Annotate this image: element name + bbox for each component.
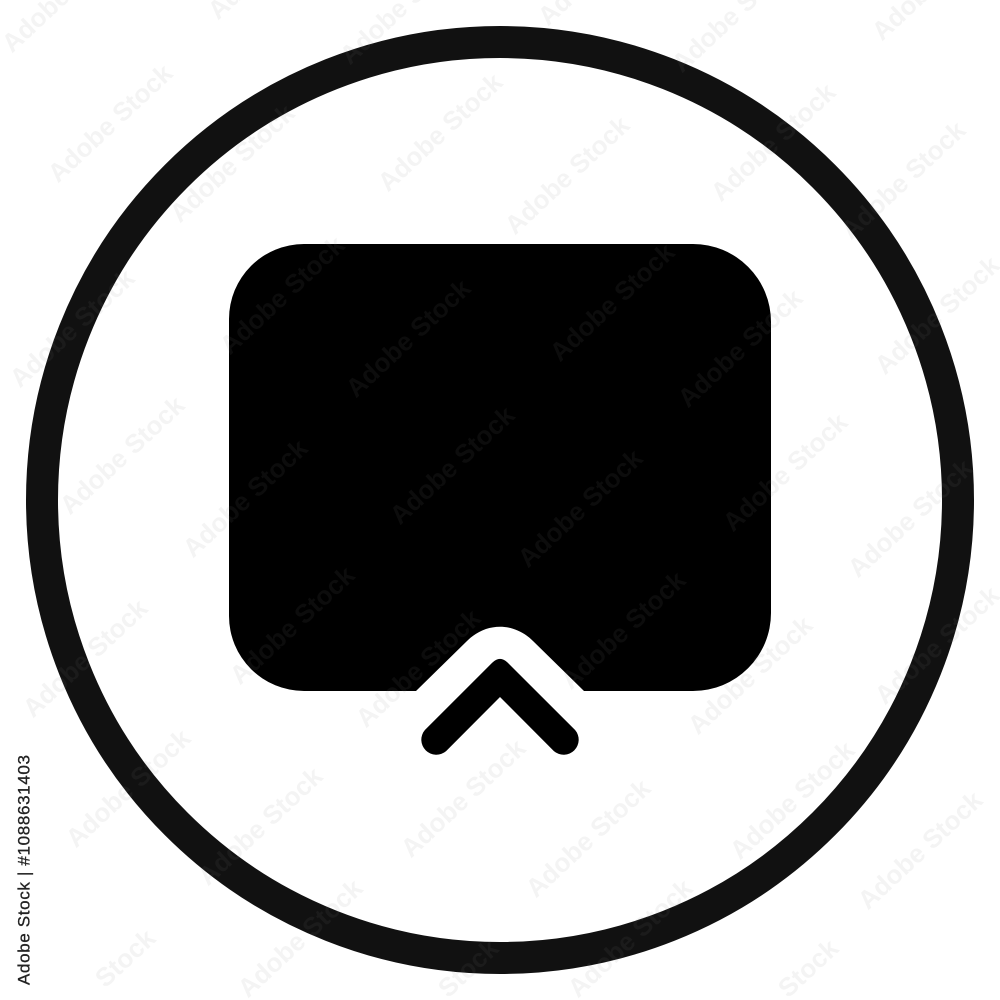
watermark pattern: Adobe Stock xyxy=(499,109,636,240)
watermark pattern: Adobe Stock xyxy=(350,602,487,733)
watermark pattern: Adobe Stock xyxy=(544,236,681,367)
watermark pattern: Adobe Stock xyxy=(4,262,141,393)
stock image credit: Adobe Stock | #1088631403 xyxy=(14,755,34,985)
watermark pattern: Adobe Stock xyxy=(835,114,972,245)
watermark pattern: Adobe Stock xyxy=(60,722,197,853)
watermark pattern: Adobe Stock xyxy=(562,872,699,1000)
watermark pattern: Adobe Stock xyxy=(42,57,179,188)
watermark pattern: Adobe Stock xyxy=(717,406,854,537)
watermark pattern: Adobe Stock xyxy=(384,399,521,530)
watermark pattern: Stock xyxy=(89,923,162,993)
icon: rounded screen with notch xyxy=(229,244,771,691)
watermark pattern: Adobe Stock xyxy=(340,272,477,403)
watermark pattern: Adobe Stock xyxy=(164,97,301,228)
icon: upward chevron xyxy=(421,659,579,755)
watermark pattern: Adobe Stock xyxy=(214,229,351,360)
watermark pattern: Adobe Stock xyxy=(555,564,692,695)
watermark pattern: Adobe Stock xyxy=(852,784,989,915)
watermark pattern: Adobe Stock xyxy=(372,66,509,197)
watermark pattern: Adobe Stock xyxy=(724,734,861,865)
watermark pattern: Adobe Stock xyxy=(842,452,979,583)
watermark pattern: Adobe Stock xyxy=(672,282,809,413)
watermark pattern: Adobe Stock xyxy=(512,442,649,573)
watermark pattern: Adobe Stock xyxy=(682,609,819,740)
watermark pattern: Adobe Stock xyxy=(520,772,657,903)
watermark pattern: Adobe Stock xyxy=(232,872,369,1000)
watermark pattern: Adobe Stock xyxy=(705,76,842,207)
watermark pattern: Adobe Stock xyxy=(54,389,191,520)
watermark pattern: Adobe Stock xyxy=(224,559,361,690)
watermark pattern: Adobe Stock xyxy=(395,732,532,863)
watermark pattern: Adobe Stock xyxy=(17,592,154,723)
watermark pattern: Adobe Stock xyxy=(192,760,329,891)
watermark pattern: Adobe Stock xyxy=(177,432,314,563)
